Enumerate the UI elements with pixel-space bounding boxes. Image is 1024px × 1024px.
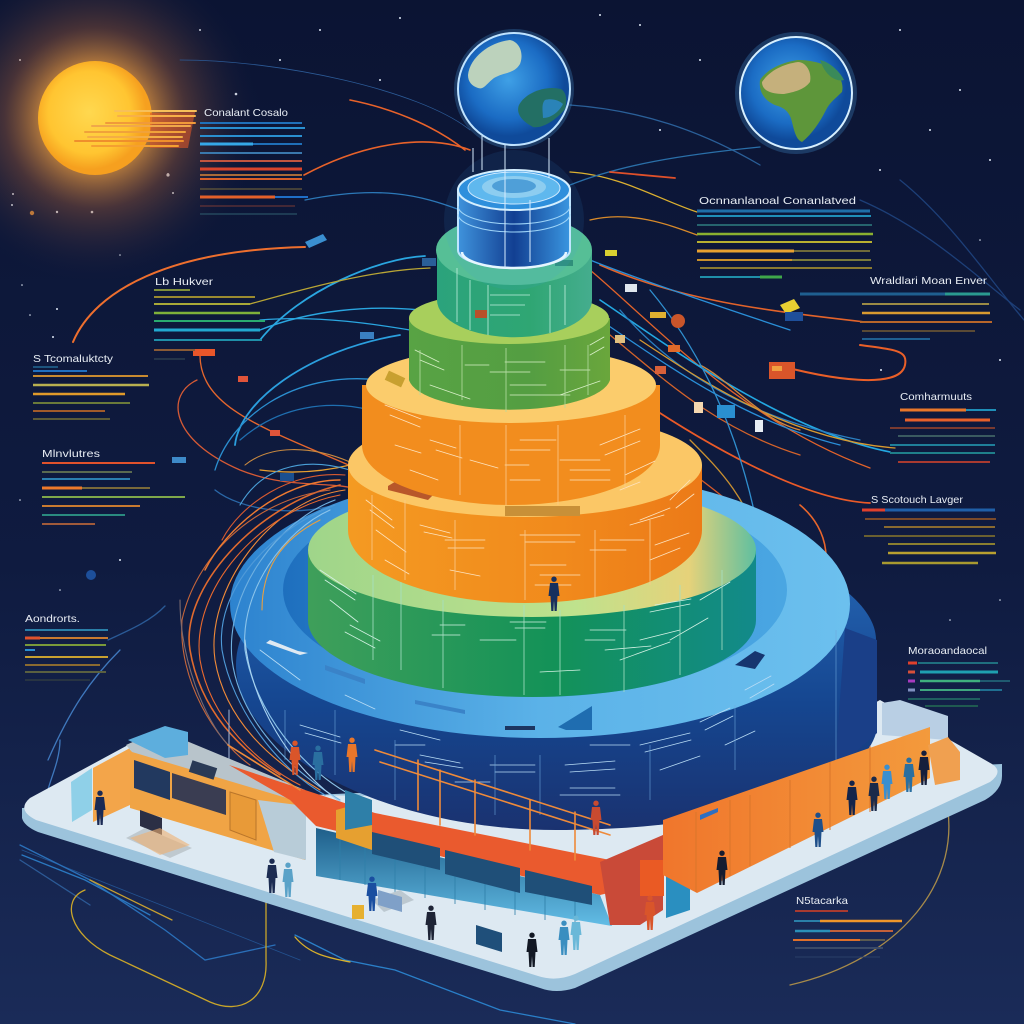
- label: Comharmuuts: [890, 391, 996, 462]
- inner yellow ledge: [700, 520, 756, 620]
- floating icons: [172, 234, 803, 481]
- tier: teal: [436, 215, 592, 337]
- continents: [760, 60, 844, 142]
- central red and teal building: [228, 745, 690, 926]
- wall text marks: [260, 650, 774, 795]
- red upper band: [229, 765, 663, 895]
- orange railing: [228, 745, 610, 860]
- platform: [22, 700, 1002, 991]
- earth: top globe: [454, 29, 574, 149]
- wall corner: [835, 628, 877, 770]
- blue sign: [700, 808, 718, 820]
- inner blue channel: [283, 483, 787, 697]
- platform surface: [24, 700, 998, 979]
- flowing line bundle: [180, 450, 360, 805]
- label: Lb Hukver: [154, 276, 265, 359]
- label: Moraoandaocal: [908, 645, 1010, 706]
- tier: upper orange: [362, 347, 660, 505]
- door: [230, 792, 256, 840]
- platform edge: [22, 764, 1002, 991]
- right orange building: [663, 700, 960, 893]
- colored display: [336, 800, 372, 850]
- labels on green: [320, 570, 730, 672]
- label: S Tcomaluktcty: [33, 353, 149, 419]
- label: N5tacarka: [793, 895, 902, 957]
- label: Mlnvlutres: Mlnvlutres: [42, 448, 100, 460]
- continents: [468, 40, 566, 127]
- side crate: [928, 737, 960, 785]
- orange machine: [640, 860, 664, 896]
- label: Conalant Cosalo: [200, 107, 308, 214]
- label: S Scotouch Lavger: S Scotouch Lavger: [871, 494, 964, 506]
- sun data streaks: [75, 111, 196, 148]
- rooftop box: [128, 726, 188, 758]
- tier: green base: [308, 483, 756, 697]
- label: Lb Hukver: Lb Hukver: [155, 276, 214, 288]
- label: S Scotouch Lavger: [862, 494, 996, 563]
- light ring surface: [230, 470, 850, 738]
- teal cabinet: [666, 864, 690, 918]
- orange side wall: [93, 748, 130, 822]
- tier: lower orange: [348, 413, 702, 603]
- wall door lines: [696, 746, 870, 892]
- gold hatch: [505, 506, 580, 516]
- label: Wraldlari Moan Enver: Wraldlari Moan Enver: [870, 275, 988, 287]
- people: [94, 576, 930, 967]
- left building: [71, 726, 306, 860]
- label: Moraoandaocal: Moraoandaocal: [908, 645, 987, 657]
- label: Comharmuuts: Comharmuuts: [900, 391, 972, 403]
- pale box: [882, 700, 948, 740]
- labels on upper orange: [385, 405, 655, 490]
- brown hatch: [388, 480, 434, 500]
- craft on ring: [735, 651, 765, 669]
- dark wedge on ring: [558, 706, 592, 730]
- sun: [0, 0, 260, 283]
- labels on lower orange: [366, 480, 694, 585]
- tier: blue cylinder: [444, 150, 584, 290]
- dark windows: [372, 832, 592, 905]
- wall vertical seams: [285, 630, 836, 815]
- front wall: [130, 750, 305, 860]
- kiosk: [71, 768, 92, 822]
- column: [258, 800, 306, 860]
- earth: right globe: [735, 32, 857, 154]
- label: Ocnnanlanoal Conanlatved: Ocnnanlanoal Conanlatved: [699, 195, 856, 207]
- green top surface: [409, 292, 609, 344]
- labels on green tier: [415, 337, 604, 399]
- teal top surface: [436, 215, 592, 285]
- label: Aondrorts.: [25, 613, 108, 680]
- star field: [11, 14, 1001, 621]
- upper orange surface: [366, 347, 656, 423]
- laptop: [140, 810, 162, 835]
- label: Conalant Cosalo: Conalant Cosalo: [204, 107, 288, 119]
- outer dark wall: [236, 515, 876, 830]
- orange surface: [348, 413, 702, 517]
- support posts to globe: [473, 136, 549, 268]
- tier: green: [409, 292, 610, 412]
- label: N5tacarka: N5tacarka: [796, 895, 848, 907]
- teal seams: [340, 835, 575, 924]
- label: Aondrorts.: Aondrorts.: [25, 613, 80, 625]
- roof: [126, 730, 305, 802]
- big blue base: [230, 470, 877, 830]
- red right block: [600, 835, 663, 925]
- label: S Tcomaluktcty: S Tcomaluktcty: [33, 353, 114, 365]
- equipment on platform floor: [130, 828, 502, 952]
- orange wall: [663, 727, 930, 893]
- green surface: [308, 483, 756, 617]
- window row: [134, 760, 170, 800]
- teal lower wall: [316, 828, 612, 926]
